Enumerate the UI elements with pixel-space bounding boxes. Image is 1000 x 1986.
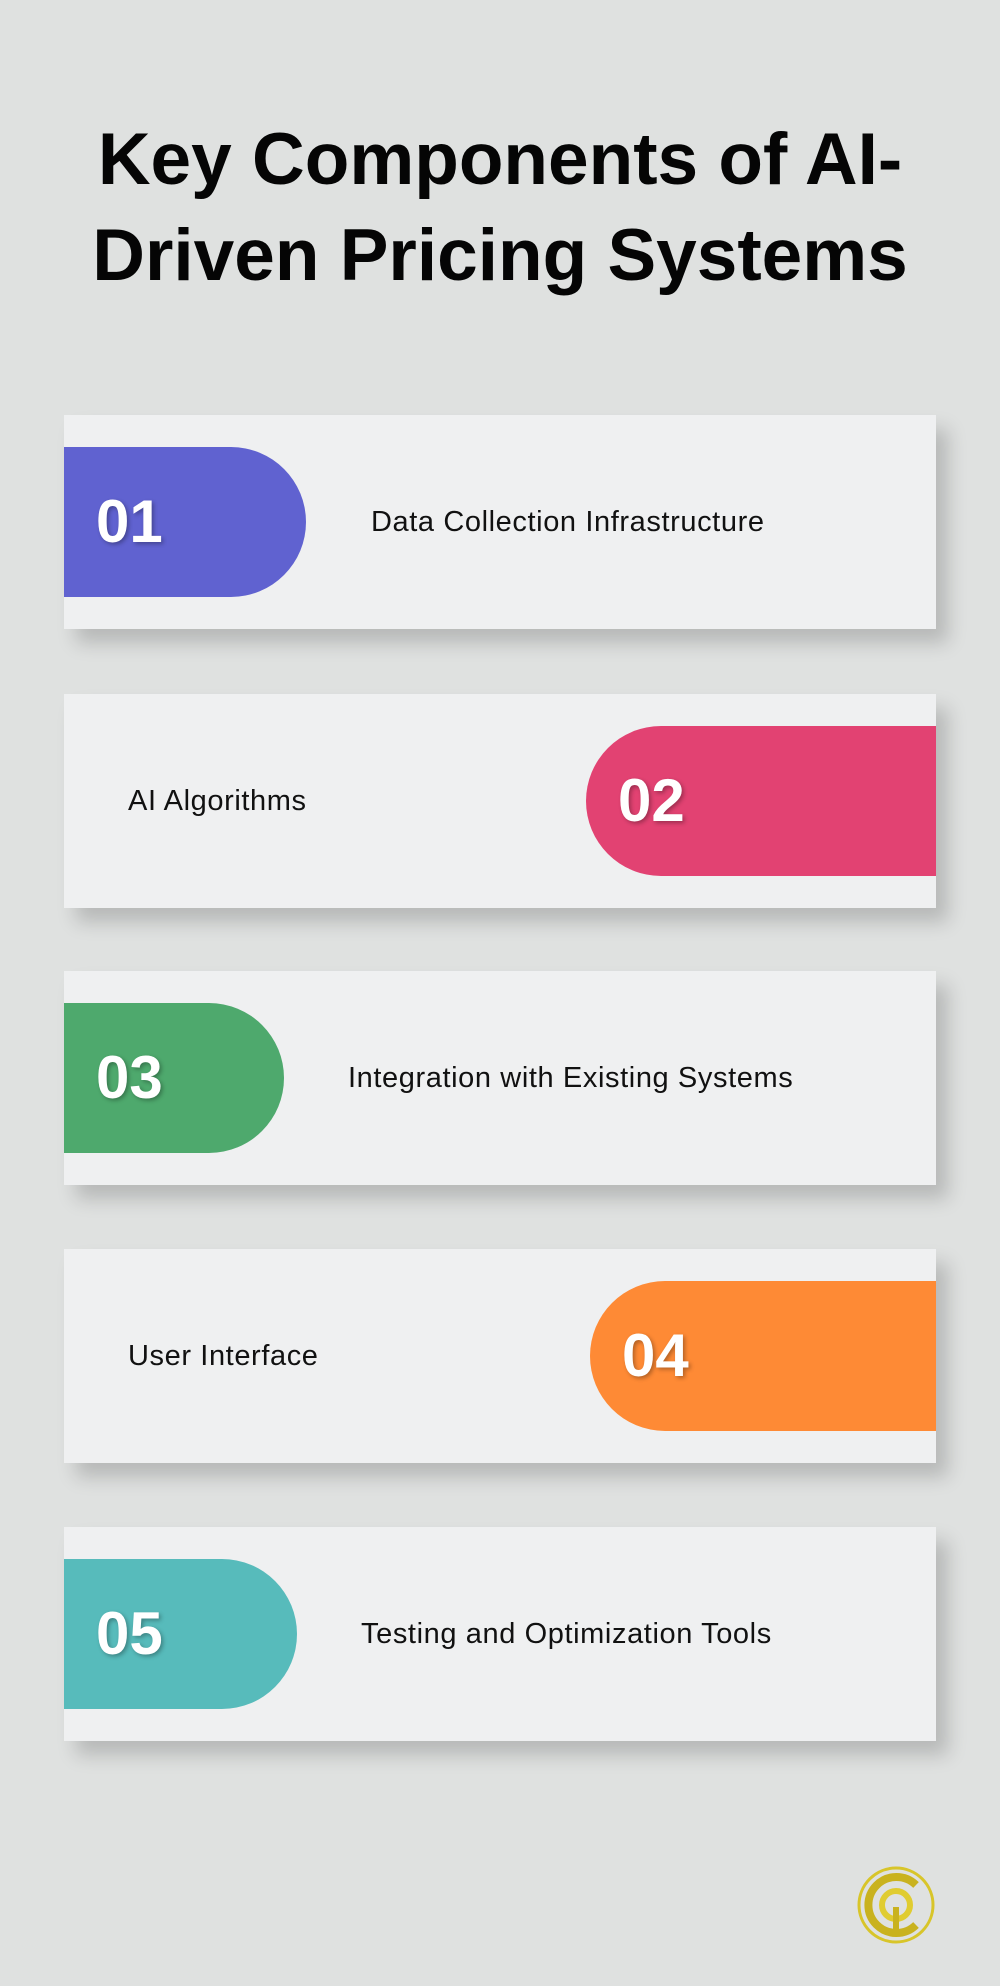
card 3 [64,971,936,1185]
text 1: Data Collection Infrastructure [371,506,765,538]
title [92,119,908,296]
text 3: Integration with Existing Systems [348,1062,793,1094]
pill 05 [64,1559,297,1709]
card 1 [64,415,936,629]
pill 03: 03 [96,1044,163,1111]
pill 01 [64,447,306,597]
pill 01: 01 [96,488,163,555]
pill 02 [586,726,936,876]
pill 04 [590,1281,936,1431]
text 5: Testing and Optimization Tools [361,1618,772,1650]
logo [858,1866,934,1944]
pill 05: 05 [96,1600,163,1667]
title: Driven Pricing Systems [92,215,908,296]
pill 03 [64,1003,284,1153]
text 4: User Interface [128,1340,319,1372]
pill 04: 04 [622,1322,689,1389]
text 2: AI Algorithms [128,785,307,817]
pill 02: 02 [618,767,685,834]
card 5 [64,1527,936,1741]
card 4 [64,1249,936,1463]
card 2 [64,694,936,908]
title: Key Components of AI- [98,119,902,200]
